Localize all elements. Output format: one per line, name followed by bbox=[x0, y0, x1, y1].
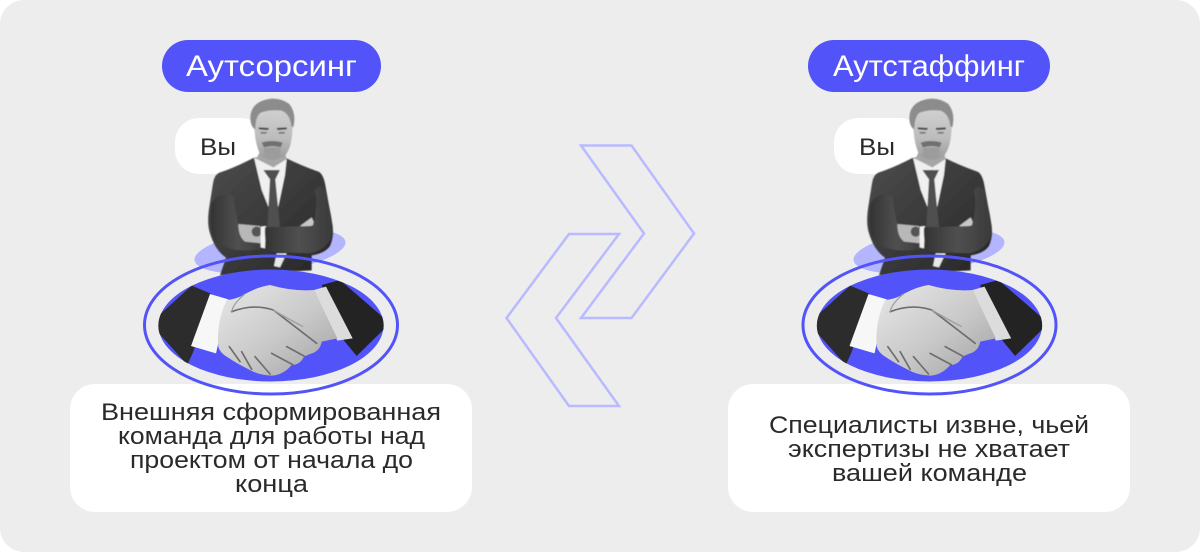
arrow: left chevron bbox=[506, 234, 619, 406]
blue ellipse bbox=[158, 270, 384, 382]
photo: handshake bbox=[808, 280, 1048, 376]
description card: outsourcing: проектом от начала до bbox=[130, 447, 413, 474]
photo: businessman bbox=[208, 99, 333, 275]
description card: outsourcing: Внешняя сформированная bbox=[101, 399, 441, 426]
label: you: Вы bbox=[859, 134, 895, 161]
arrow: right chevron bbox=[581, 146, 694, 318]
photo: handshake bbox=[150, 280, 390, 376]
heading: outstaffing: Аутстаффинг bbox=[833, 50, 1025, 83]
description card: outsourcing: конца bbox=[235, 471, 309, 498]
description card: outstaffing: экспертизы не хватает bbox=[788, 436, 1070, 463]
panel: outsourcing bbox=[70, 40, 472, 512]
label: you bbox=[834, 118, 924, 174]
description card: outstaffing: Специалисты извне, чьей bbox=[769, 412, 1089, 439]
heading: outstaffing bbox=[808, 40, 1050, 92]
label: you bbox=[175, 118, 265, 174]
heading: outsourcing bbox=[162, 40, 381, 92]
panel: outstaffing bbox=[728, 40, 1130, 512]
ring around handshake bbox=[144, 256, 398, 394]
backdrop ellipse: person bbox=[851, 221, 1007, 281]
ring around handshake bbox=[803, 256, 1056, 394]
photo: businessman bbox=[867, 99, 992, 275]
label: you: Вы bbox=[200, 134, 236, 161]
blue ellipse bbox=[817, 270, 1042, 382]
description card: outstaffing: вашей команде bbox=[832, 460, 1027, 487]
description card: outsourcing: команда для работы над bbox=[118, 423, 425, 450]
description card: outsourcing bbox=[70, 384, 472, 512]
heading: outsourcing: Аутсорсинг bbox=[186, 50, 357, 83]
description card: outstaffing bbox=[728, 384, 1130, 512]
backdrop ellipse: person bbox=[192, 221, 348, 281]
